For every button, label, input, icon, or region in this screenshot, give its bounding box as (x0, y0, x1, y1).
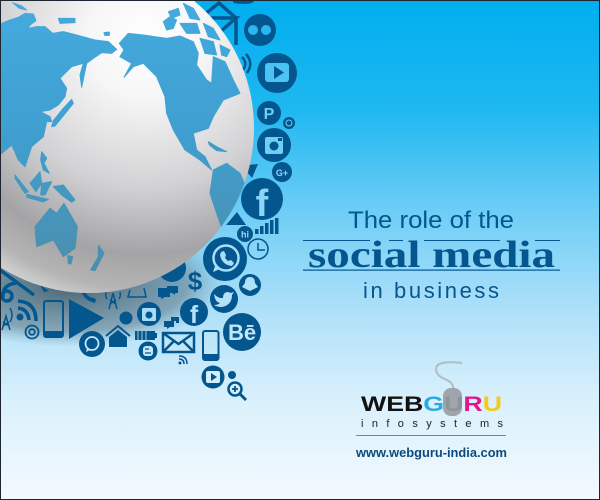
icon: smartphone right (203, 331, 218, 360)
icon: partial mark (40, 285, 49, 292)
globe (0, 0, 254, 293)
icon: whatsapp large (203, 237, 247, 281)
icon: rss small (178, 356, 187, 364)
icon: laptop under globe (128, 288, 146, 297)
icon: top partial tab (232, 0, 255, 4)
icon: play circle (202, 366, 224, 388)
icon: facebook large (241, 178, 283, 225)
continents group scaled (0, 3, 245, 271)
Arctic island 2 (168, 8, 180, 18)
Cuba and Caribbean (208, 142, 227, 152)
title line 1: The role of the (348, 207, 514, 234)
logo tagline: infosystems (361, 418, 504, 430)
icon: pinterest (257, 101, 281, 125)
icon: pinterest: P (264, 106, 275, 123)
globe shadow (0, 223, 225, 347)
icon: partial bookmark (247, 164, 258, 178)
Borneo (30, 172, 42, 192)
icon cluster: social media icons (0, 0, 297, 400)
Arctic island 7 (220, 45, 230, 57)
icon: phone handset (81, 290, 96, 303)
icon: flickr (244, 14, 276, 46)
Japan (52, 99, 73, 127)
Arctic island 1 (163, 17, 177, 30)
icon: tower under globe (106, 292, 120, 309)
icon: google plus: G+ (276, 168, 288, 178)
icon: mail envelope (163, 333, 194, 352)
icon: facebook small (180, 298, 208, 329)
Arctic islet (58, 18, 75, 23)
title line 2: social media (308, 234, 555, 276)
Arctic island 4 (180, 23, 200, 33)
Arctic island 6 (200, 38, 217, 55)
icon: video play (257, 53, 297, 93)
logo: webguru infosystems (355, 362, 507, 460)
icon: hi bubble (237, 226, 253, 242)
icon: signal bars (255, 218, 278, 234)
North America (119, 33, 240, 170)
icon: behance (223, 313, 261, 351)
icon: partial triangle (226, 212, 246, 225)
Sumatra (15, 175, 28, 193)
logo divider (356, 435, 506, 436)
icon: broadcast waves (242, 54, 250, 73)
icon: blogger (138, 342, 158, 360)
logo mouse and cable (436, 362, 462, 416)
title rule top (303, 240, 560, 242)
icon: home (106, 326, 130, 347)
icon: clock (248, 239, 268, 259)
title line 3: in business (363, 278, 499, 303)
icon: twitter (210, 285, 238, 313)
title rule bottom (303, 270, 560, 271)
icon: dribbble (283, 117, 295, 129)
Philippines (41, 152, 49, 173)
icon: copyright (26, 326, 38, 338)
Arctic islet east (104, 32, 109, 35)
title block (303, 207, 560, 303)
icon: dollar: $ (188, 266, 203, 296)
globe sphere (0, 0, 254, 293)
icon: hi bubble: hi (241, 230, 249, 240)
icon: instagram small (137, 302, 161, 326)
icon: smartphone left (44, 301, 63, 337)
Tasmania (68, 256, 73, 264)
Asia (0, 13, 117, 167)
icon: wifi (16, 301, 36, 321)
logo wordmark: WEB GURU (361, 393, 502, 416)
icon: behance: Bē (228, 320, 256, 345)
Java (27, 194, 48, 202)
website url: www.webguru-india.com (355, 445, 507, 460)
icon: chat bubbles small (164, 317, 179, 329)
icon: snapchat (239, 274, 261, 296)
New Zealand (91, 245, 104, 271)
icon: google plus (272, 162, 292, 182)
icon: battery (135, 331, 157, 340)
icon: envelope top (205, 3, 236, 45)
South America (210, 163, 245, 230)
icon: magnifier (228, 382, 246, 400)
icon: instagram (257, 128, 291, 162)
New Guinea (53, 185, 75, 202)
Siberian island (13, 3, 27, 10)
icon: tower left (0, 308, 12, 330)
icon: dark disc under globe (158, 254, 186, 282)
Arctic island 3 (183, 3, 200, 20)
icon: network partial (0, 270, 34, 301)
icon: whatsapp small (79, 331, 105, 357)
icon: dot (120, 312, 132, 324)
icon: play triangle (69, 299, 104, 339)
Arctic island 5 (203, 23, 220, 40)
icon: chat bubbles (158, 286, 178, 299)
continents (0, 3, 245, 271)
icon: small speaker dot (228, 371, 236, 379)
icon: facebook large: f (256, 183, 269, 225)
Australia (35, 203, 77, 257)
Sulawesi (41, 182, 52, 195)
icon: facebook small: f (190, 301, 199, 329)
